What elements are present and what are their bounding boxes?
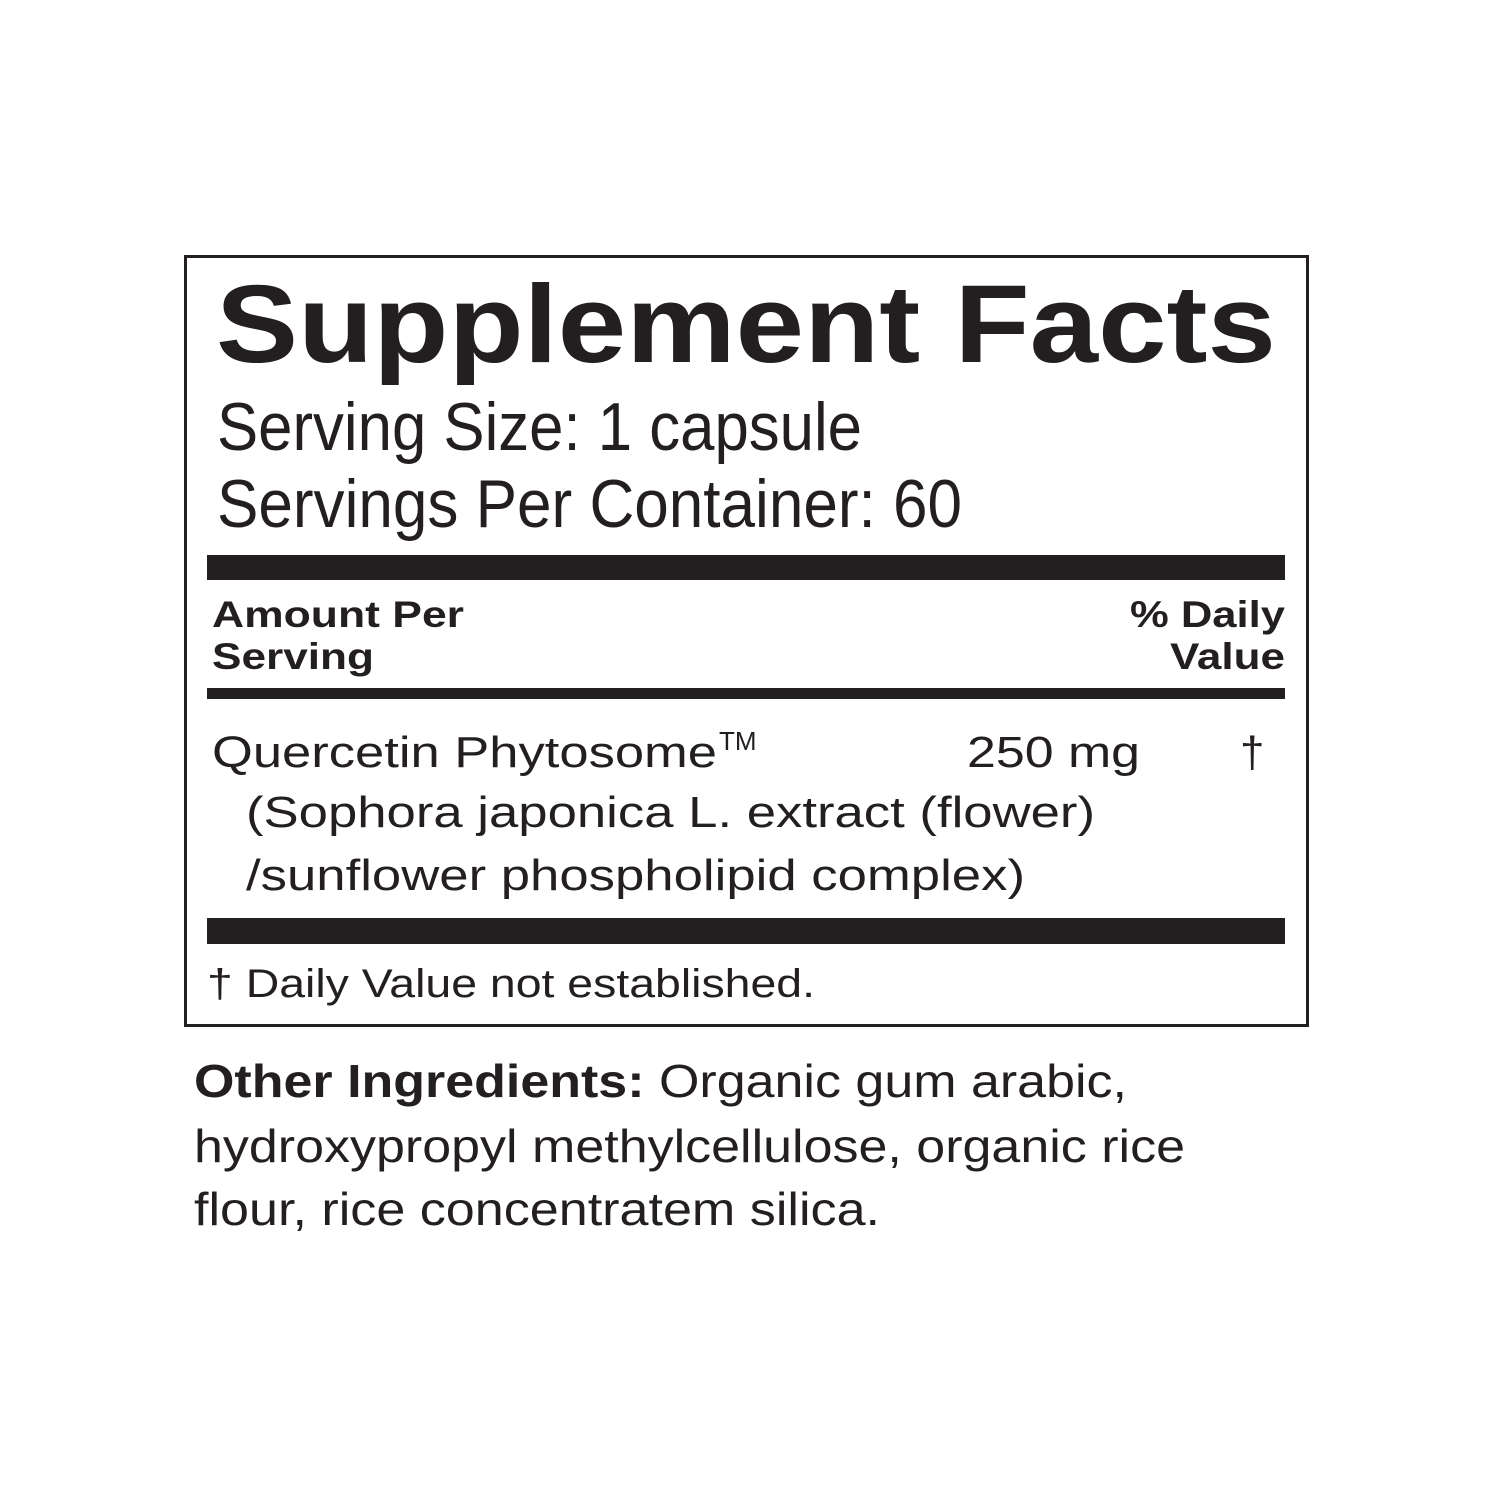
- header: daily value: Value: [1170, 636, 1285, 677]
- text: servings per container: Servings Per Container: 60: [217, 466, 962, 542]
- header: amount per serving: Amount Per: [212, 594, 464, 635]
- footnote: † Daily Value not established.: [207, 962, 815, 1006]
- header: daily value: [1130, 594, 1285, 677]
- ingredient row: TM: [719, 726, 757, 756]
- text block: other ingredients: flour, rice concentratem silica.: [194, 1183, 880, 1235]
- text block: other ingredients: [194, 1055, 1185, 1235]
- text: serving size: Serving Size: 1 capsule: [217, 389, 862, 465]
- header: daily value: % Daily: [1130, 594, 1285, 635]
- text block: other ingredients: Other Ingredients: Organic gum arabic,: [194, 1055, 1127, 1107]
- ingredient row: †: [1240, 728, 1264, 777]
- text block: other ingredients: hydroxypropyl methylcellulose, organic rice: [194, 1120, 1185, 1172]
- header: amount per serving: Serving: [212, 636, 374, 677]
- ingredient row: (Sophora japonica L. extract (flower): [246, 788, 1095, 837]
- ingredient row: /sunflower phospholipid complex): [246, 851, 1025, 900]
- ingredient row: [212, 726, 1264, 900]
- ingredient row: 250 mg: [967, 728, 1140, 777]
- thick divider: [207, 555, 1285, 580]
- thin divider: [207, 688, 1285, 699]
- panel: supplement facts box: [186, 256, 1308, 1026]
- title: Supplement Facts: [216, 263, 1276, 386]
- ingredient row: Quercetin Phytosome: [212, 728, 717, 777]
- thick divider: [207, 918, 1285, 944]
- header: amount per serving: [212, 594, 464, 677]
